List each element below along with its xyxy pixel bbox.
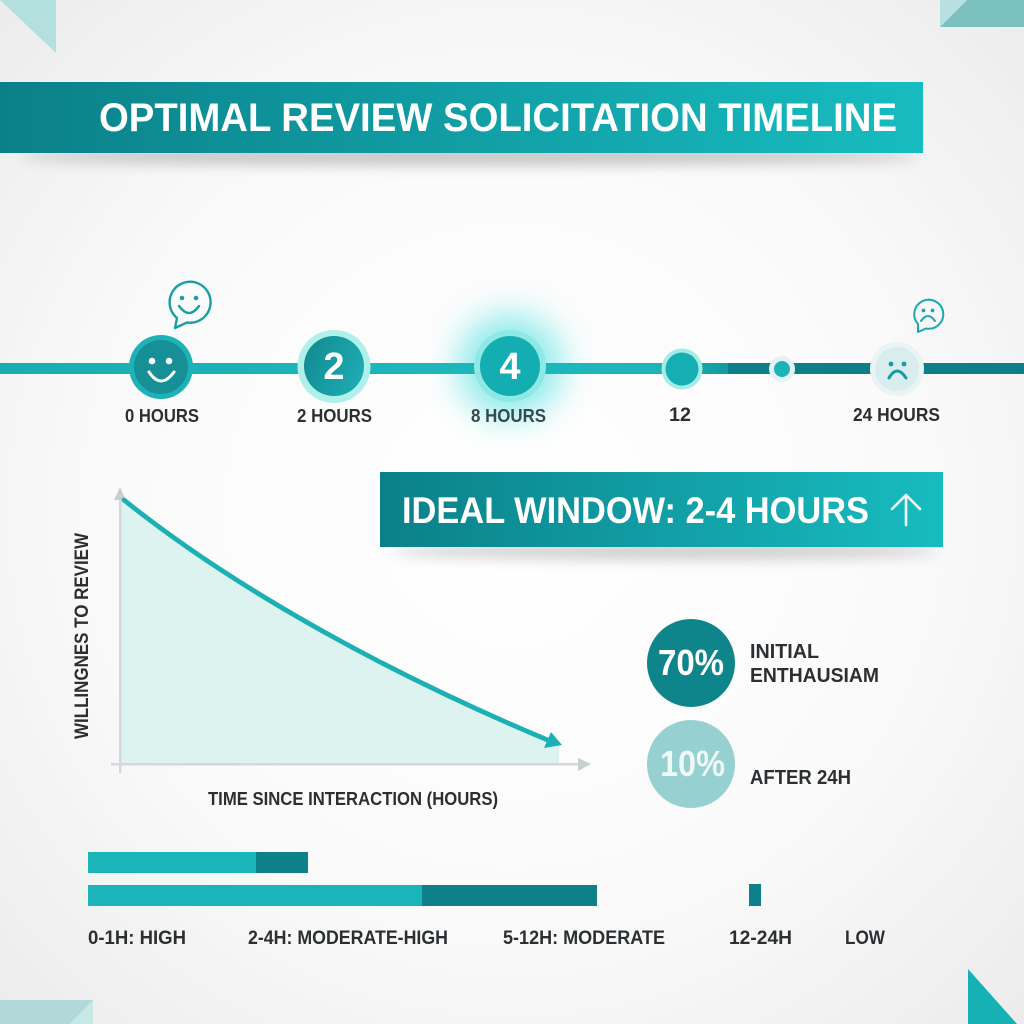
ideal window callout: [380, 472, 943, 559]
corner decoration: bottom right: [968, 969, 1017, 1024]
stat: 70 percent: [647, 619, 879, 707]
bar 2: [88, 885, 597, 906]
node: 12 hours: [662, 348, 702, 390]
stat label: initial enthusiasm: ENTHAUSIAM: [750, 665, 879, 687]
y axis label: WILLINGNES TO REVIEW: [72, 533, 93, 739]
line chart: willingness decay: [72, 487, 591, 809]
legend: [88, 928, 885, 949]
callout text: IDEAL WINDOW: 2-4 HOURS: [402, 490, 869, 531]
node: 2 hours: [298, 330, 370, 403]
stat: 70 percent: 70%: [658, 642, 724, 683]
bar 3: [749, 884, 761, 906]
decay curve with arrow: [124, 500, 562, 748]
label: 2 hours: 2 HOURS: [297, 406, 372, 426]
legend: 12-24h: 12-24H: [729, 928, 792, 949]
node: 24 hours: [870, 342, 924, 396]
x axis label: TIME SINCE INTERACTION (HOURS): [208, 789, 498, 809]
stat label: after 24h: AFTER 24H: [750, 767, 851, 789]
stat label: initial enthusiasm: [750, 641, 879, 687]
title: OPTIMAL REVIEW SOLICITATION TIMELINE: [99, 96, 897, 140]
label: 0 hours: 0 HOURS: [125, 406, 199, 426]
x axis: [111, 758, 591, 771]
stat: 10 percent: [647, 720, 851, 808]
stat: 10 percent: 10%: [660, 743, 725, 784]
icon: sad speech bubble: [914, 300, 943, 332]
label: 24 hours: 24 HOURS: [853, 405, 940, 425]
timeline line late segment: [728, 363, 1024, 374]
corner decoration: top left: [0, 0, 56, 53]
corner decoration: top right: [940, 0, 1024, 27]
stacked bars: [88, 852, 761, 906]
y axis: [114, 487, 126, 773]
timeline glow: [458, 314, 562, 418]
legend: 2-4h: 2-4H: MODERATE-HIGH: [248, 928, 448, 949]
node: 2 hours: 2: [323, 346, 345, 388]
icon: up arrow: [892, 495, 920, 525]
legend: low: LOW: [845, 928, 885, 949]
label: 8 hours: 8 HOURS: [471, 406, 546, 426]
title banner: [0, 82, 923, 165]
node: 4 hours: 4: [499, 346, 521, 388]
label: 12: 12: [669, 405, 691, 426]
bar 1: [88, 852, 308, 873]
chart area fill: [121, 497, 559, 763]
node: 0 hours: [129, 335, 193, 399]
corner decoration: bottom left: [0, 1000, 93, 1024]
legend: 0-1h: 0-1H: HIGH: [88, 928, 186, 949]
stat label: initial enthusiasm: INITIAL: [750, 641, 819, 663]
icon: happy speech bubble: [170, 282, 211, 328]
timeline line early segment: [0, 363, 728, 374]
timeline: [0, 282, 1024, 426]
node: 4 hours: [474, 330, 546, 402]
node: intermediate: [769, 356, 795, 382]
legend: 5-12h: 5-12H: MODERATE: [503, 928, 665, 949]
